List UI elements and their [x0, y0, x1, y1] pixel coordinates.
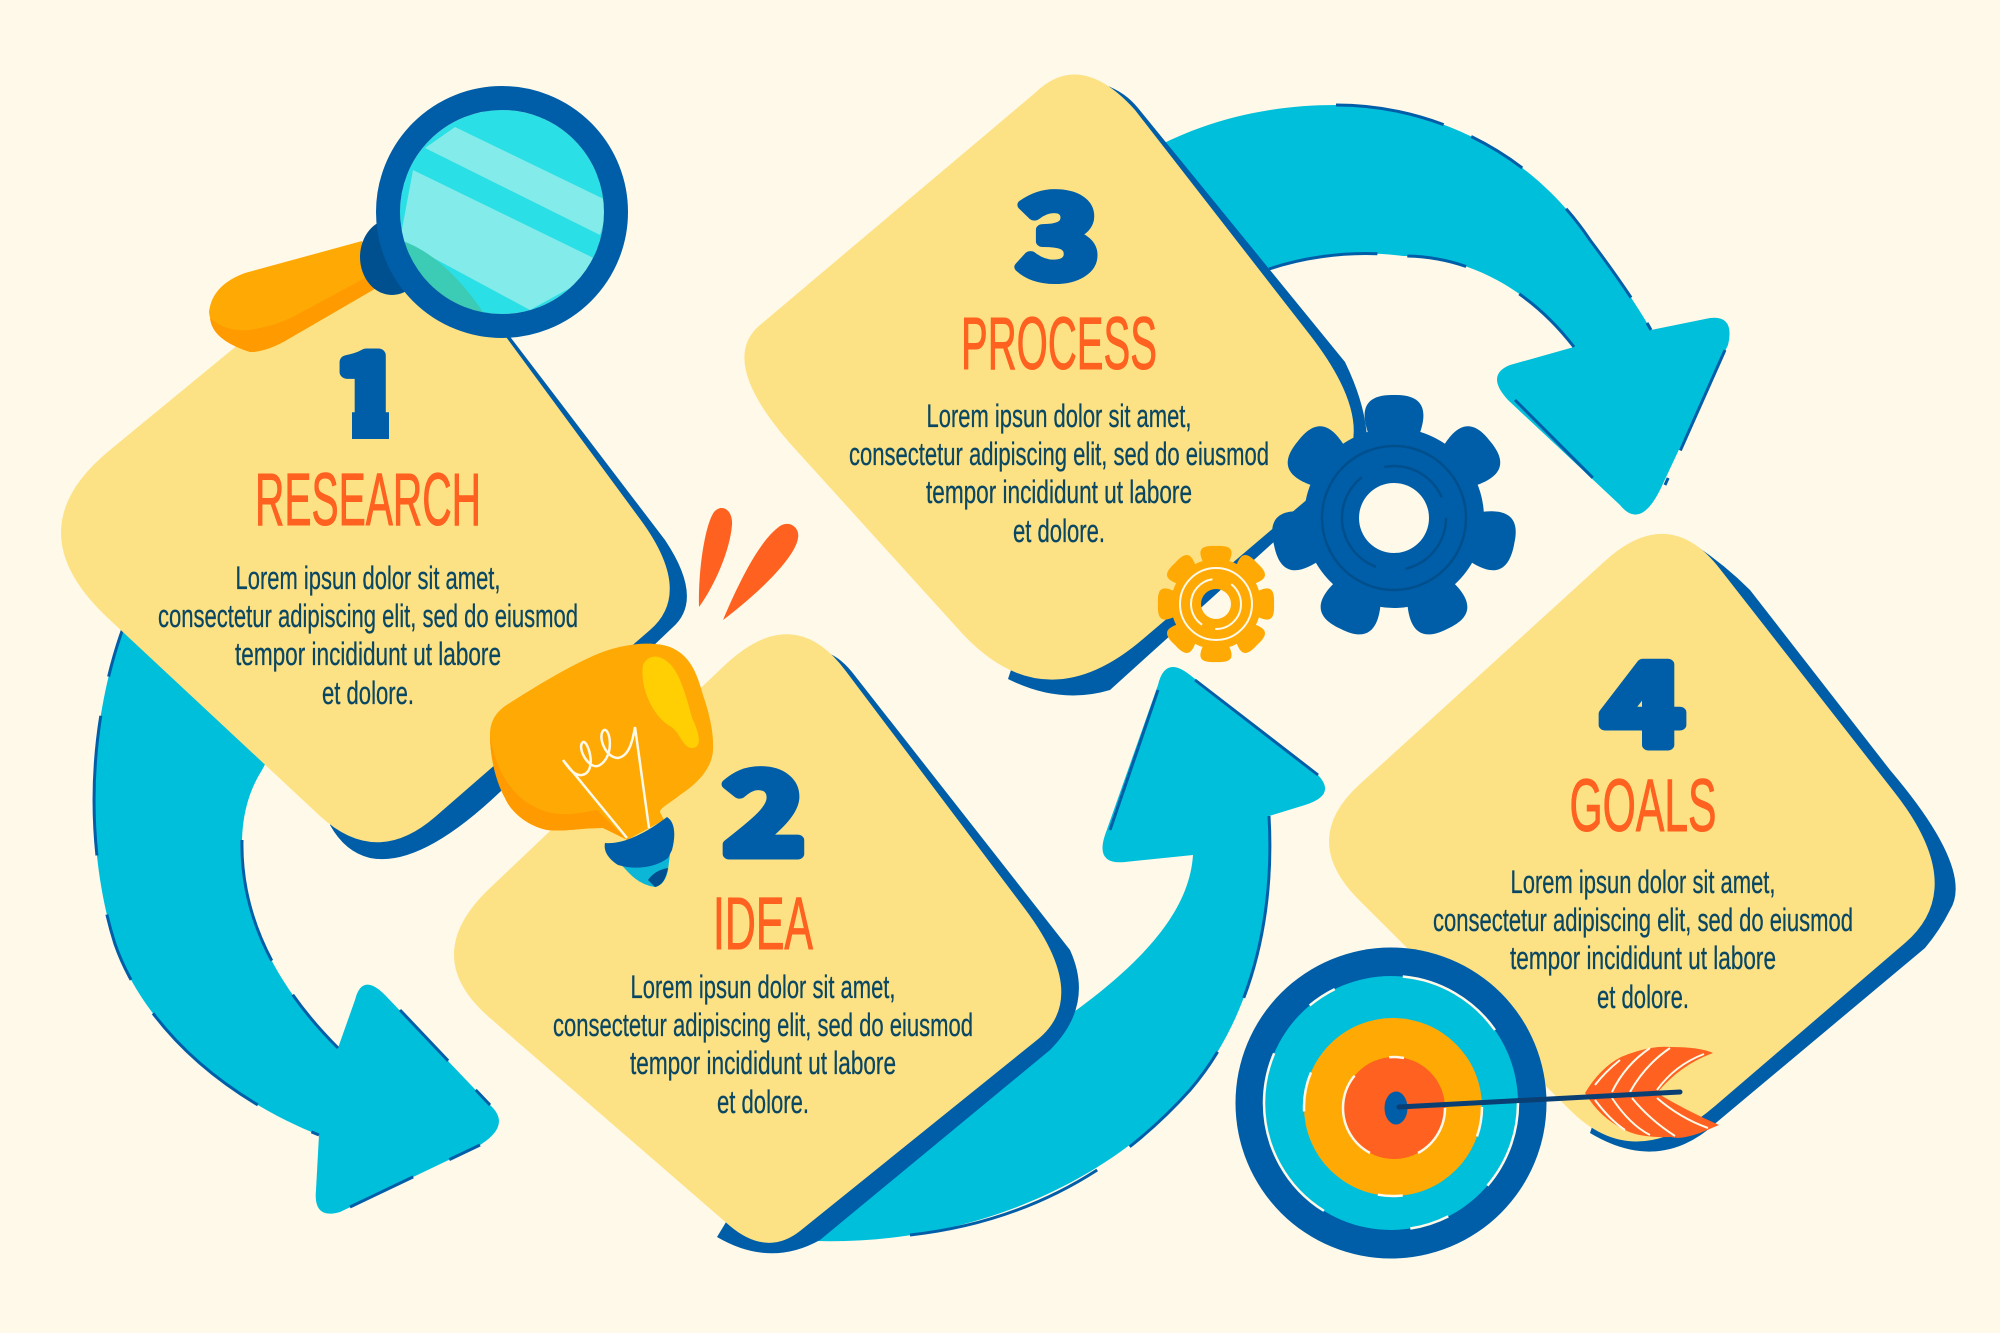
glass shade	[490, 735, 625, 838]
tip shade	[648, 868, 668, 887]
panel body	[61, 241, 670, 842]
arrow: idea to process	[816, 667, 1325, 1241]
body text: et dolore.	[1597, 979, 1689, 1015]
outer ring	[1236, 948, 1546, 1258]
step number: 3	[1018, 148, 1098, 310]
body text: consectetur adipiscing elit, sed do eiusmod	[553, 1007, 973, 1043]
panel body	[454, 634, 1061, 1243]
cyan ring	[1264, 976, 1518, 1230]
icon: large gear	[1268, 395, 1520, 642]
arrow fletching	[1585, 1047, 1719, 1138]
heading: IDEA	[713, 882, 813, 965]
body text: tempor incididunt ut labore	[630, 1045, 896, 1081]
rim	[388, 98, 616, 326]
sparks	[699, 508, 798, 620]
screw base	[605, 817, 674, 868]
body text	[1433, 864, 1853, 1015]
body text: Lorem ipsun dolor sit amet,	[630, 969, 896, 1005]
arrow shaft	[1399, 1092, 1680, 1107]
step number: 2	[724, 725, 804, 887]
icon: light bulb	[490, 508, 798, 887]
panel shadow	[1008, 85, 1367, 695]
filament	[563, 727, 649, 838]
panel body	[744, 75, 1354, 680]
panel shadow	[717, 652, 1079, 1253]
heading: GOALS	[1570, 764, 1716, 847]
body text	[158, 560, 578, 711]
tip	[612, 838, 672, 887]
fletching lines	[1595, 1048, 1708, 1136]
body text: tempor incididunt ut labore	[926, 474, 1192, 510]
red centre	[1343, 1057, 1445, 1159]
bullseye	[1384, 1092, 1408, 1124]
panel shadow	[330, 330, 687, 859]
body text: et dolore.	[1013, 513, 1105, 549]
panel body	[1329, 534, 1935, 1142]
body text: et dolore.	[322, 675, 414, 711]
orange ring	[1304, 1018, 1482, 1196]
step number: 1	[335, 309, 401, 463]
handle shade	[210, 277, 378, 352]
panel: step 2 idea	[454, 634, 1079, 1253]
body text: et dolore.	[717, 1084, 809, 1120]
heading: PROCESS	[961, 302, 1157, 385]
body text: Lorem ipsun dolor sit amet,	[926, 398, 1192, 434]
arrow: process to goals	[1160, 105, 1730, 515]
body text	[849, 398, 1269, 549]
body text: Lorem ipsun dolor sit amet,	[236, 560, 500, 596]
panel: step 3 process	[744, 75, 1367, 695]
step number: 4	[1602, 616, 1684, 778]
panel: step 1 research	[61, 241, 687, 859]
body text: tempor incididunt ut labore	[1510, 940, 1776, 976]
icon: target with arrow	[1236, 948, 1719, 1258]
lens	[395, 105, 610, 320]
panel: step 4 goals	[1329, 534, 1956, 1152]
dashed highlights	[1264, 976, 1518, 1230]
icon: magnifying glass	[209, 98, 616, 352]
body text: tempor incididunt ut labore	[235, 636, 501, 672]
heading: RESEARCH	[255, 458, 481, 541]
body text	[553, 969, 973, 1120]
collar	[360, 219, 424, 295]
body text: Lorem ipsun dolor sit amet,	[1510, 864, 1776, 900]
panel shadow	[1590, 545, 1956, 1152]
glass	[490, 644, 713, 840]
body text: consectetur adipiscing elit, sed do eiusmod	[158, 598, 578, 634]
arrow: research to idea	[94, 610, 499, 1214]
highlight	[642, 657, 699, 748]
icon: small gear	[1158, 546, 1274, 662]
body text: consectetur adipiscing elit, sed do eiusmod	[849, 436, 1269, 472]
handle	[209, 241, 378, 352]
